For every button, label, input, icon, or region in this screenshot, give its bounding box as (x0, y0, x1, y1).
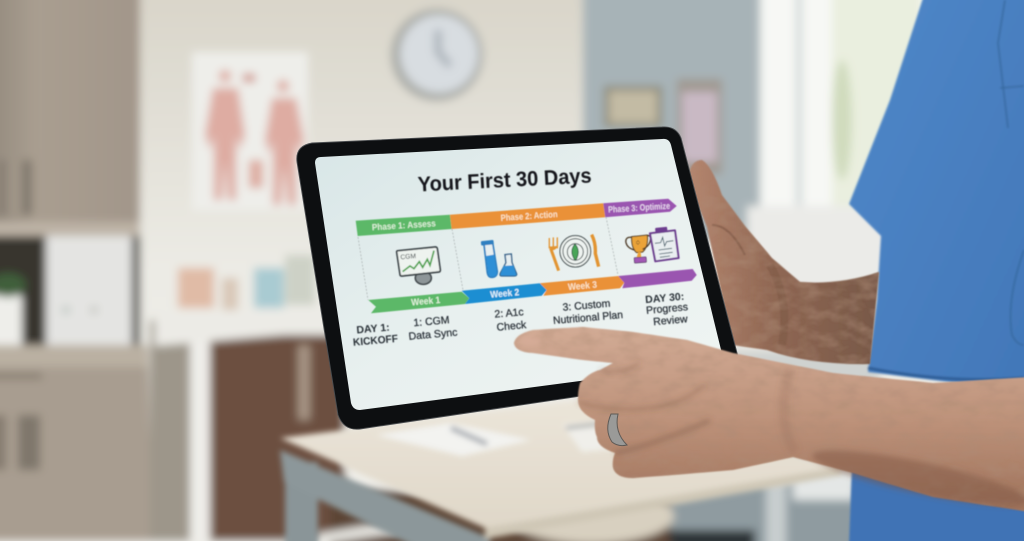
label: day 1 kickoff (353, 322, 399, 349)
label: A1c check: 2: A1c (494, 306, 524, 321)
label: A1c check: Check (496, 319, 528, 334)
pedestal and floor strip (316, 488, 674, 541)
phase banners: Phase 1: Assess (372, 218, 436, 232)
phase banners: Phase 3: Optimize (608, 201, 670, 215)
shelf niche with binders (0, 236, 140, 348)
label: day 30 progress review (645, 291, 689, 328)
label: day 1 kickoff: DAY 1: (356, 322, 390, 336)
knuckle and finger shading (519, 336, 1024, 517)
label: day 30 progress review: DAY 30: (645, 291, 685, 306)
icon: CGM monitor (397, 247, 440, 284)
label: CGM data sync: 1: CGM (413, 314, 450, 329)
window (730, 0, 930, 480)
phase banners: Phase 2: Action (500, 209, 558, 223)
blue-grey right wall (583, 0, 763, 240)
week ribbon (368, 269, 697, 313)
wall clock (391, 9, 483, 101)
title: Your First 30 Days (417, 164, 592, 197)
label: day 30 progress review: Progress (646, 301, 688, 317)
tablet screen (315, 139, 724, 410)
label: custom nutritional plan (553, 298, 624, 327)
phase banners (356, 199, 677, 236)
upper cabinet (0, 0, 140, 236)
icon: CGM monitor: CGM (400, 253, 416, 261)
tablet (297, 127, 742, 429)
week ribbon: Week 1 (411, 295, 441, 308)
timeline graphic (353, 164, 697, 349)
skin (514, 327, 1024, 512)
lower cabinet (0, 345, 152, 541)
desk (280, 400, 842, 541)
icon: wedding ring (608, 414, 627, 446)
week ribbon: Week 3 (568, 280, 597, 293)
label: custom nutritional plan: Nutritional Plan (553, 309, 624, 327)
label: CGM data sync (408, 314, 458, 343)
scrubs (849, 0, 1024, 541)
label: CGM data sync: Data Sync (408, 327, 458, 343)
icon: trophy and clipboard (626, 227, 679, 263)
side cabinet (150, 308, 345, 541)
lower wall and floor (330, 472, 860, 541)
icon: test tube and flask (481, 240, 517, 277)
holding hand behind tablet (688, 160, 879, 364)
label: A1c check (494, 306, 528, 334)
pointing hand and forearm (514, 327, 1024, 517)
week ribbon: Week 2 (490, 287, 520, 301)
anatomy poster (192, 52, 308, 210)
label: day 1 kickoff: KICKOFF (353, 333, 399, 349)
milestone labels (353, 291, 689, 349)
counter items (178, 255, 315, 310)
icon: plate, fork and knife (549, 235, 599, 271)
label: day 30 progress review: Review (653, 313, 689, 328)
label: custom nutritional plan: 3: Custom (562, 298, 611, 314)
dashed dividers (358, 217, 618, 300)
tablet body (297, 127, 742, 429)
